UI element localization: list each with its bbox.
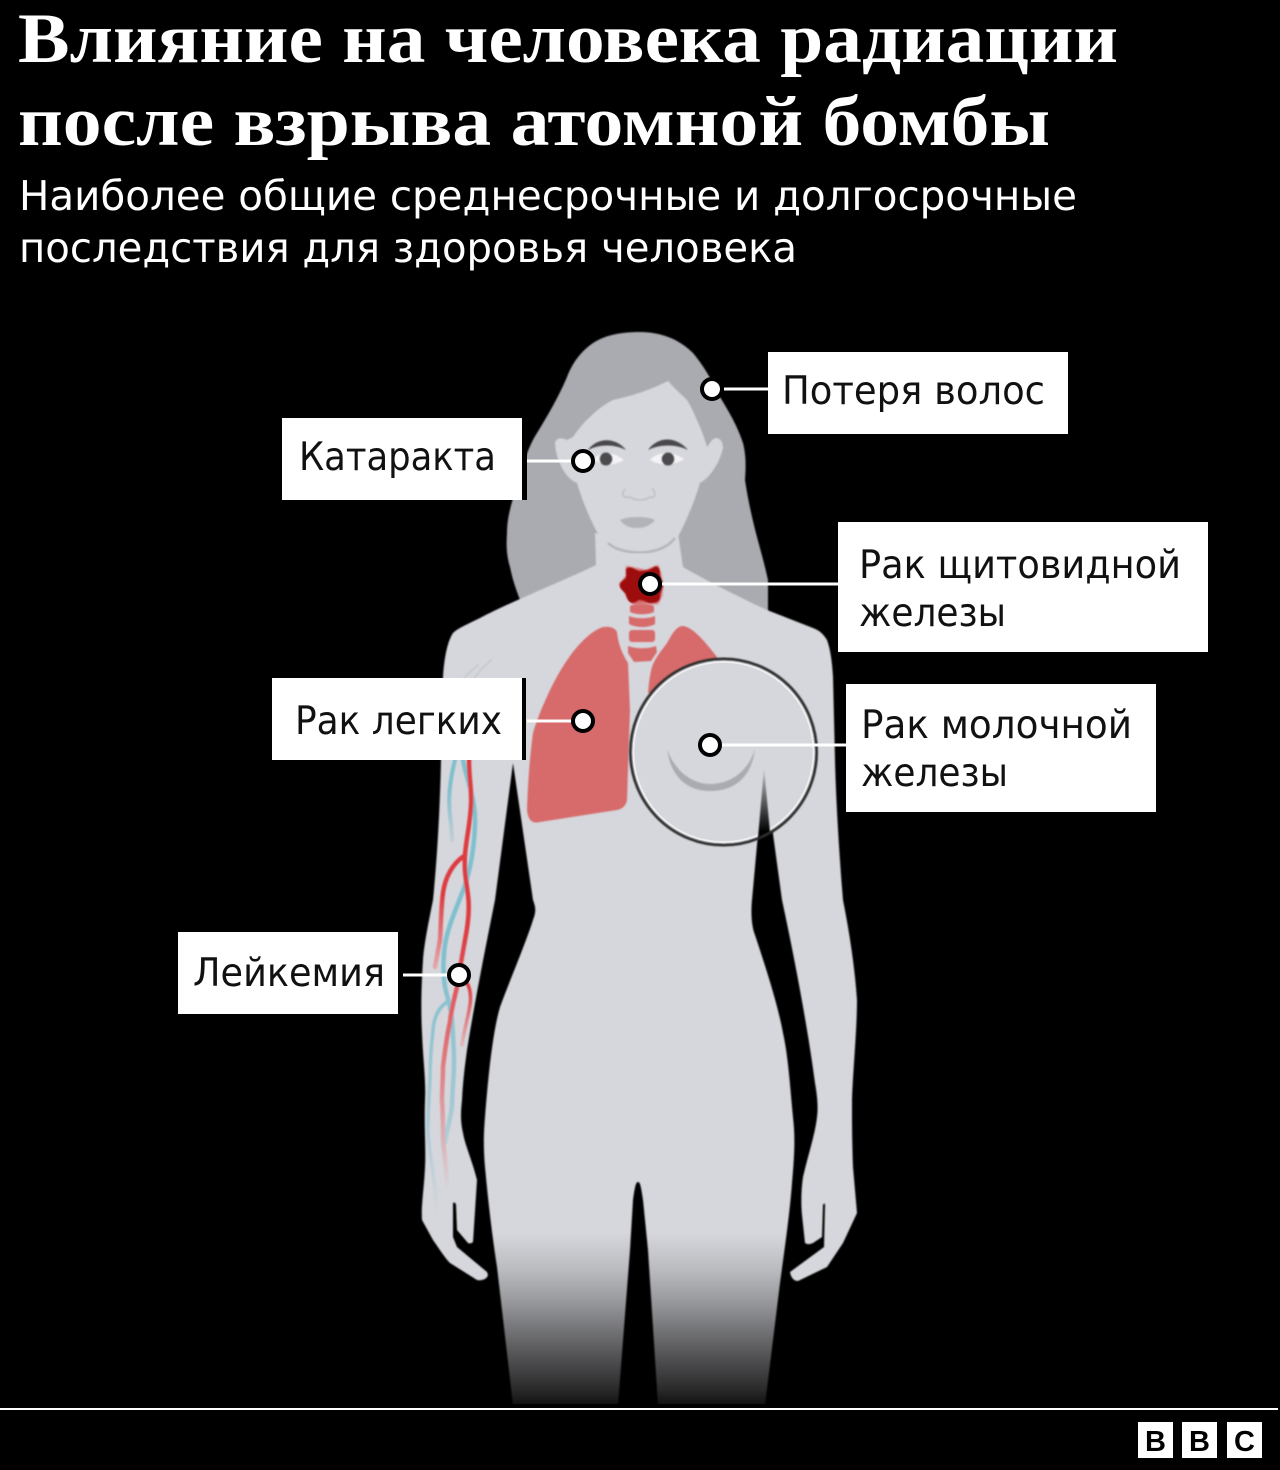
subtitle: Наиболее общие среднесрочные и долгосрочные [19, 172, 1077, 220]
thyroid tumour [619, 565, 663, 605]
title: Влияние на человека радиации [18, 0, 1118, 78]
breast inset circle [630, 659, 816, 845]
callout: thyroid cancer: Рак щитовидной [859, 543, 1181, 588]
trachea [628, 604, 657, 662]
callout: breast cancer: Рак молочной [861, 703, 1132, 748]
BBC logo [1138, 1422, 1262, 1458]
BBC logo: B [1145, 1426, 1166, 1458]
face [555, 381, 723, 556]
arm veins [428, 660, 491, 1215]
callout: cataract: Катаракта [299, 435, 496, 480]
callout: breast cancer [700, 684, 1156, 812]
callout: thyroid cancer: железы [859, 591, 1006, 636]
title [18, 0, 1118, 161]
footer rule [0, 1408, 1278, 1410]
breast contour [667, 749, 755, 791]
subtitle: последствия для здоровья человека [19, 224, 797, 272]
body silhouette [421, 533, 857, 1405]
subtitle [19, 172, 1077, 272]
callout: hair loss [702, 352, 1068, 434]
callout: leukemia [178, 932, 469, 1014]
lungs [527, 626, 717, 822]
title: после взрыва атомной бомбы [18, 83, 1050, 161]
nose [623, 488, 655, 500]
jaw line [608, 538, 675, 553]
eyes [588, 440, 688, 466]
BBC logo: B [1189, 1426, 1210, 1458]
callout: lung cancer: Рак легких [295, 699, 502, 744]
hair [507, 332, 768, 640]
gap between arm and torso [758, 768, 770, 838]
callout: thyroid cancer [640, 522, 1208, 652]
human figure [421, 332, 857, 1408]
callout: leukemia: Лейкемия [193, 951, 385, 996]
mouth [620, 517, 655, 528]
callout: cataract [282, 418, 593, 500]
BBC logo: C [1234, 1426, 1255, 1458]
callout: lung cancer [272, 678, 593, 760]
callout: hair loss: Потеря волос [782, 369, 1045, 414]
callout: breast cancer: железы [861, 751, 1008, 796]
leg fade [489, 1233, 789, 1406]
